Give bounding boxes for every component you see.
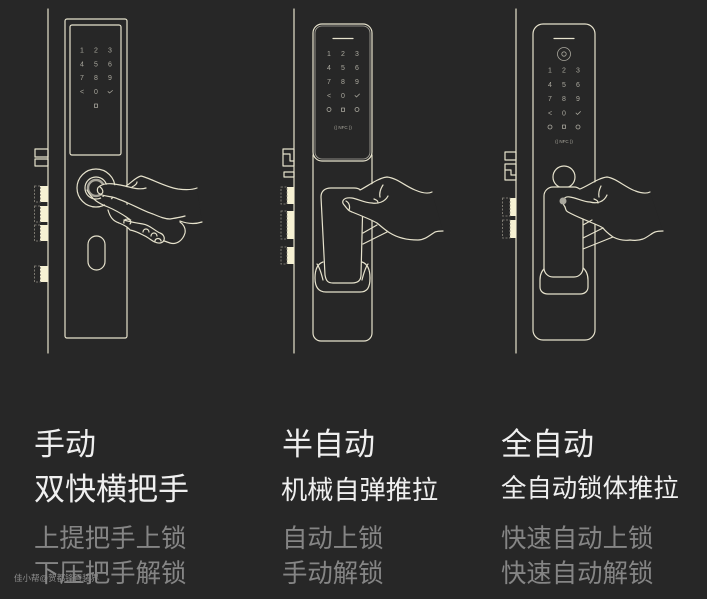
keypad digits: 3 [108,48,112,54]
heading: fully automatic: 全自动 [501,427,594,462]
status slot [554,38,574,40]
watermark: 佳小帮@贺都锋智装界 [14,573,99,583]
knob [553,166,575,188]
subheading: fully automatic: 全自动锁体推拉 [501,475,679,503]
hand [97,176,202,243]
keypad digits: 0 [94,89,98,96]
keypad digits: 5 [94,62,98,68]
keypad digits: 9 [576,96,580,103]
keypad screen [313,24,372,161]
keypad digits: 6 [576,82,580,89]
latch plates [505,152,516,180]
keypad digits: 1 [548,68,552,74]
door edge line [47,9,49,353]
keypad digits: < [80,89,84,96]
status slot [333,38,353,40]
keypad digits: 1 [327,51,331,58]
keypad digits: < [327,93,331,100]
keypad digits: 9 [108,75,112,82]
heading: semi-automatic: 半自动 [282,427,375,462]
lever handle [87,190,186,244]
keypad digits [80,48,112,108]
keypad digits: 4 [327,65,331,72]
handle base [315,262,370,292]
keypad digits: 7 [548,96,552,103]
door edge line [293,9,295,353]
lock plate [533,24,595,340]
keypad digits: 1 [80,48,84,54]
keypad digits: 3 [576,68,580,74]
handle [321,188,363,283]
keypad digits: 5 [341,65,345,72]
keypad digits: 2 [94,48,98,54]
column: manual text [34,427,189,588]
keypad digits: 8 [562,96,566,103]
hand [560,177,663,249]
lock plate [313,155,372,341]
subheading: semi-automatic: 机械自弹推拉 [281,475,438,505]
column: fully automatic text [501,427,679,588]
lock: semi-automatic [281,9,443,353]
curled fingers [108,210,164,243]
keypad digits [548,68,580,129]
keypad screen [70,25,121,155]
latch plates [35,149,48,166]
keypad digits: 0 [341,93,345,100]
lock: fully automatic [502,9,663,353]
lock bolts [34,186,48,282]
description line: manual unlock: 下压把手解锁 [34,560,186,588]
description line: semi-automatic unlock: 手动解锁 [282,560,384,588]
keypad digits: 8 [94,75,98,82]
handle base [540,267,588,294]
NFC label: (( NFC )) [334,125,352,130]
keypad digits: 7 [327,79,331,86]
keypad digits: 0 [562,110,566,118]
lock bolts [281,187,294,264]
keypad digits: 4 [548,82,552,89]
keypad digits: < [548,110,552,118]
description line: semi-automatic lock: 自动上锁 [282,525,384,553]
rosette and lever hub [77,169,115,207]
subheading: manual: 双快横把手 [34,472,189,507]
keypad digits: 8 [341,79,345,86]
fingerprint sensor [558,48,570,60]
description line: manual lock: 上提把手上锁 [34,525,186,553]
keyhole [88,236,105,270]
keypad digits [327,51,360,112]
keypad digits: 7 [80,75,84,82]
keypad digits: 2 [562,68,566,74]
keypad digits: 5 [562,82,566,89]
latch plates [283,149,294,177]
keypad digits: 2 [341,51,345,58]
heading: manual: 手动 [34,427,96,462]
keypad digits: 9 [355,79,359,86]
keypad digits: 6 [108,62,112,68]
description line: fully automatic lock: 快速自动上锁 [501,525,653,553]
door edge line [515,9,517,353]
description line: fully automatic unlock: 快速自动解锁 [501,560,653,588]
lock: manual [34,9,202,353]
keypad digits: 6 [355,65,359,72]
lock bolts [502,198,516,238]
handle [544,187,583,277]
lock plate [65,19,127,338]
column: semi-automatic text [281,427,438,588]
NFC label: (( NFC )) [555,139,573,144]
keypad digits: 3 [355,51,359,58]
keypad digits: 4 [80,62,84,68]
hand [343,177,443,244]
